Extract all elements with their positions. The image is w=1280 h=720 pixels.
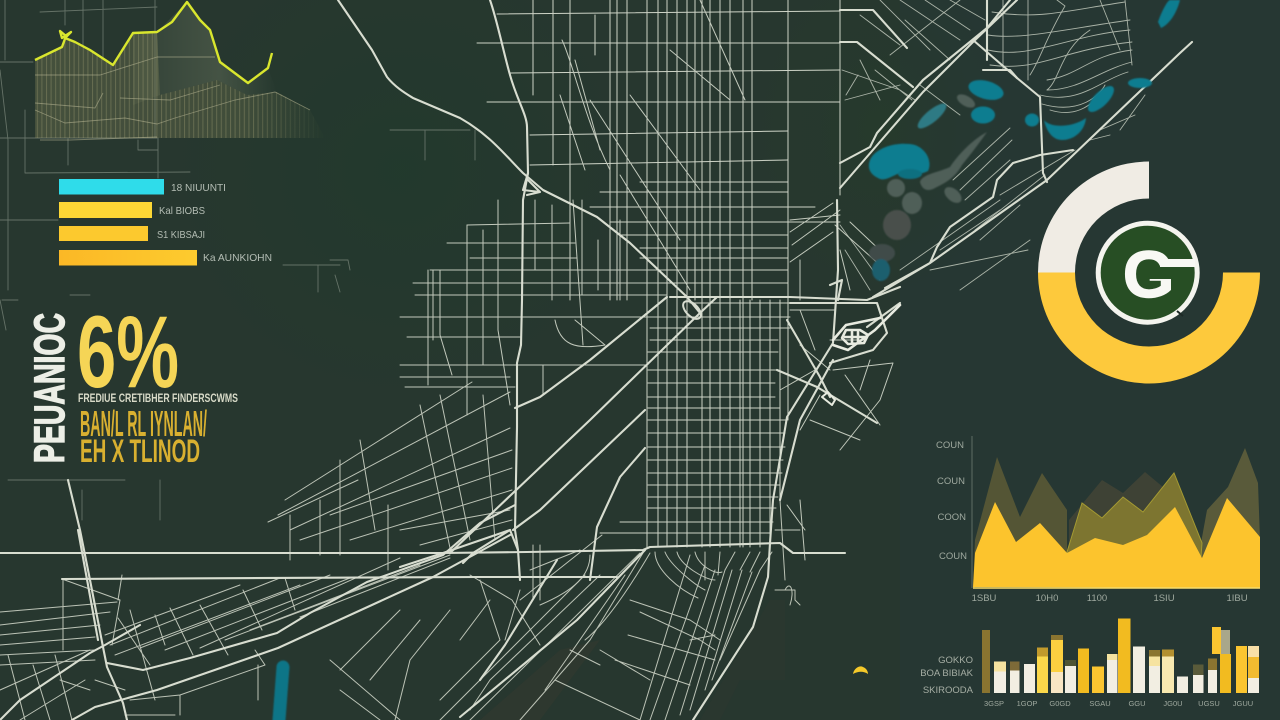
y-axis labels — [936, 440, 967, 562]
road: long east-west — [0, 543, 845, 553]
bar 3: S1 KIBSAJI — [157, 229, 205, 241]
horizontal bar list — [59, 179, 272, 266]
stat detail text — [80, 403, 207, 469]
donut chart — [1038, 162, 1260, 384]
gray parks — [869, 92, 987, 262]
bar x labels: JG0U — [1163, 699, 1183, 708]
interchange: central ring — [680, 298, 704, 322]
y-axis labels: COUN — [939, 551, 967, 562]
bar x labels: GGU — [1128, 699, 1146, 708]
road: south-west highways — [72, 535, 510, 720]
bar x labels: SGAU — [1089, 699, 1111, 708]
road: north-east highways — [840, 0, 1017, 188]
y-axis labels: COON — [938, 512, 966, 523]
eastern streets — [775, 203, 893, 560]
bar x labels: JGUU — [1233, 699, 1253, 708]
baseline — [973, 587, 1260, 589]
teal strip — [279, 667, 283, 720]
vertical heading: PEUANIOC — [26, 313, 74, 463]
bars — [982, 618, 1259, 693]
icon: small yellow marker — [853, 666, 868, 674]
bar 2 — [59, 202, 205, 218]
bar 4: Ka AUNKIOHN — [203, 252, 272, 264]
road: east — [693, 200, 838, 720]
donut yellow segment — [1038, 272, 1260, 384]
bar x labels: G0GD — [1049, 699, 1071, 708]
interchange: east ring — [833, 305, 900, 350]
north-east contour streets — [840, 0, 1145, 290]
chart inner streets — [35, 57, 310, 140]
center badge — [1098, 223, 1197, 322]
road: north-west highway — [338, 0, 700, 313]
stacked bar chart — [920, 618, 1259, 708]
stat caption: FREDIUE CRETIBHER FINDERSCWMS — [78, 393, 238, 405]
south-west street fan — [0, 382, 512, 720]
bar 1 — [59, 179, 226, 194]
bar y labels: SKIROODA — [923, 685, 974, 696]
x-axis labels: 1100 — [1087, 593, 1107, 604]
x-axis labels: 1IBU — [1226, 593, 1248, 604]
western grid streets — [400, 0, 745, 415]
bar x labels — [984, 699, 1253, 708]
south-central street fan — [330, 500, 800, 720]
teal lakes — [869, 0, 1180, 281]
road: west north-south — [490, 0, 528, 580]
area chart — [936, 436, 1260, 604]
area: dark olive right — [1201, 448, 1260, 570]
area: front yellow — [973, 498, 1260, 588]
bar 2: Kal BIOBS — [159, 205, 205, 217]
bar x labels: 3GSP — [984, 699, 1004, 708]
x-axis labels: 1SBU — [972, 593, 997, 604]
bar y labels: GOKKO — [938, 655, 973, 666]
x-axis labels: 10H0 — [1036, 593, 1058, 604]
area: olive middle — [1067, 473, 1202, 570]
area: back dark layer — [1069, 472, 1175, 560]
y-axis labels: COUN — [937, 476, 965, 487]
chart line — [35, 2, 272, 83]
chart shaded area — [35, 2, 325, 138]
bar 4 — [59, 250, 272, 266]
y-axis labels: COUN — [936, 440, 964, 451]
center badge: G — [1123, 237, 1174, 311]
infographic canvas: BAN/L RL IYNLAN/ — [80, 403, 207, 444]
bar 1: 18 NIUUNTI — [171, 182, 226, 194]
area: dark olive left — [973, 457, 1067, 588]
donut white segment — [1038, 162, 1149, 272]
bar x labels: 1GOP — [1017, 699, 1037, 708]
lakes and parks — [279, 0, 1180, 720]
x-axis labels: 1SIU — [1153, 593, 1175, 604]
stat detail text: EH X TLINOD — [80, 433, 200, 469]
central grid thin streets — [477, 0, 840, 547]
interchange: south-east knot — [822, 392, 835, 405]
axis — [971, 436, 973, 588]
big percentage stat: 6% — [77, 295, 179, 409]
road: central diagonals — [450, 297, 717, 580]
bar 3 — [59, 226, 205, 241]
bar x labels: UGSU — [1198, 699, 1220, 708]
top-left line chart — [35, 2, 325, 140]
bar y labels — [920, 655, 974, 696]
faint outer streets — [0, 0, 475, 520]
bar y labels: BOA BIBIAK — [920, 668, 974, 679]
x-axis labels — [972, 593, 1248, 604]
